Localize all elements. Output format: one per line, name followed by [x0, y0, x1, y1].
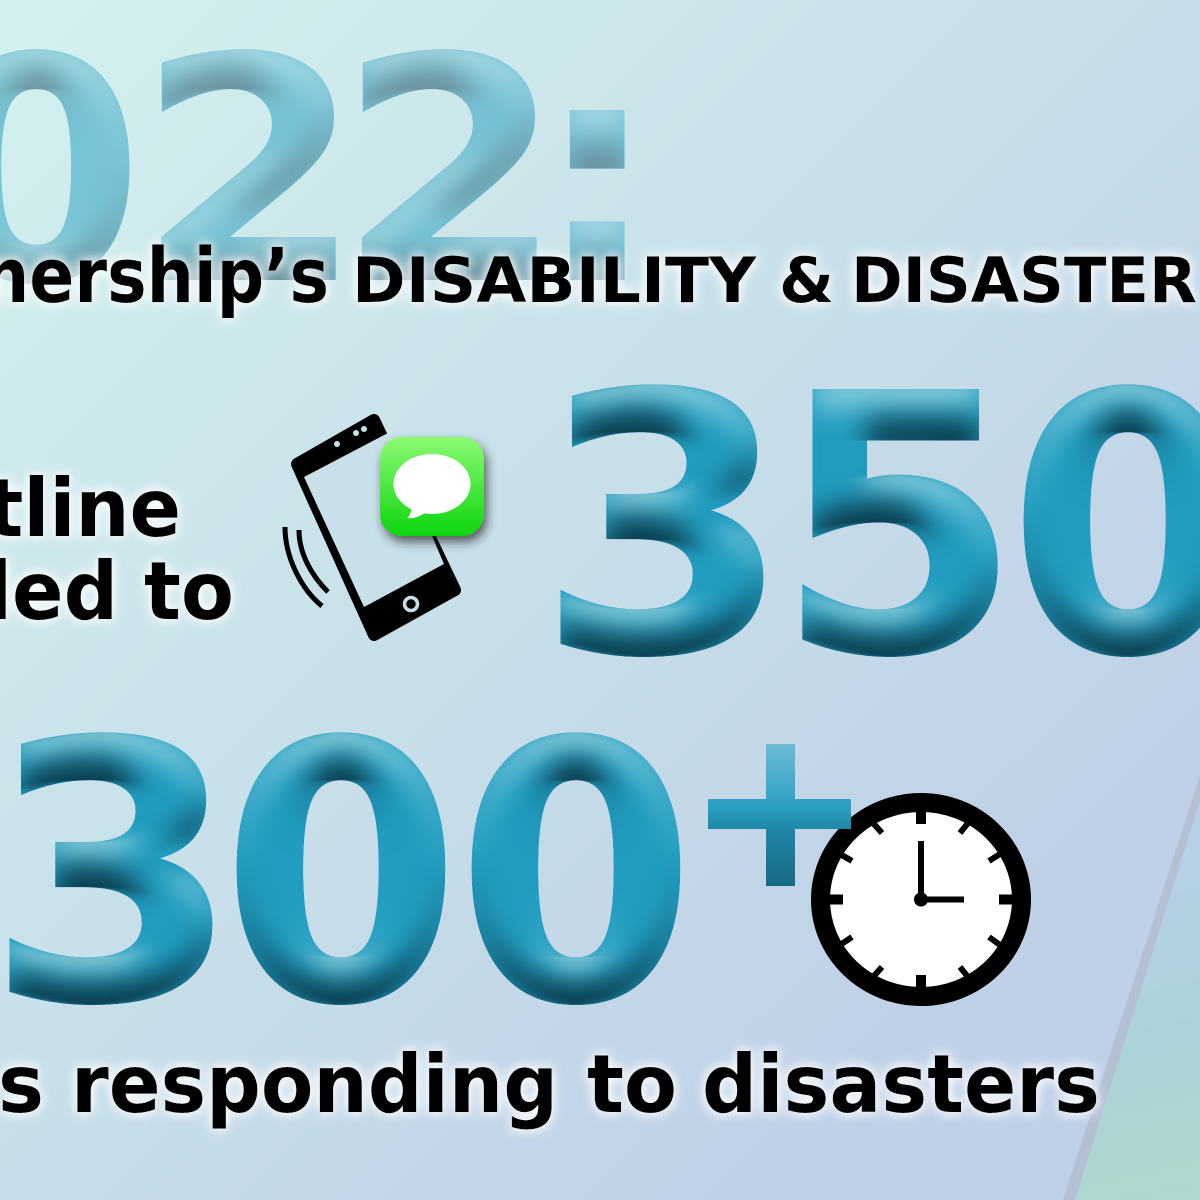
responding text: to: [587, 1038, 677, 1131]
subheading: DISABILITY: [352, 244, 757, 317]
stat: 300: 0: [221, 667, 461, 1084]
phone body: [297, 420, 455, 635]
icon: phone with message: [285, 420, 484, 635]
corner wedge: [1063, 775, 1200, 1200]
phone screen: [304, 433, 444, 607]
stat: 300: [0, 667, 696, 1084]
vibration waves: [285, 527, 328, 606]
responding text: [0, 1038, 1100, 1131]
stat: 300: 0: [456, 667, 696, 1084]
hotline text: to: [144, 545, 234, 638]
message badge: [380, 437, 484, 536]
hotline text: [0, 462, 234, 638]
stat: 350: 3: [537, 320, 792, 736]
year heading: :: [535, 0, 659, 354]
year heading: 2: [336, 0, 565, 354]
subheading: [0, 231, 1197, 320]
icon: clock: [820, 802, 1022, 996]
year heading: [0, 0, 659, 354]
stat plus sign: [708, 744, 851, 886]
year heading: 2: [135, 0, 364, 354]
responding text: disasters: [702, 1038, 1100, 1131]
responding text: responding: [71, 1038, 558, 1131]
subheading: &: [779, 244, 834, 317]
subheading: DISASTER: [851, 244, 1197, 317]
stat: 350: 5: [776, 319, 1021, 736]
phone details: [334, 426, 418, 610]
stat: 350: [537, 319, 1200, 736]
